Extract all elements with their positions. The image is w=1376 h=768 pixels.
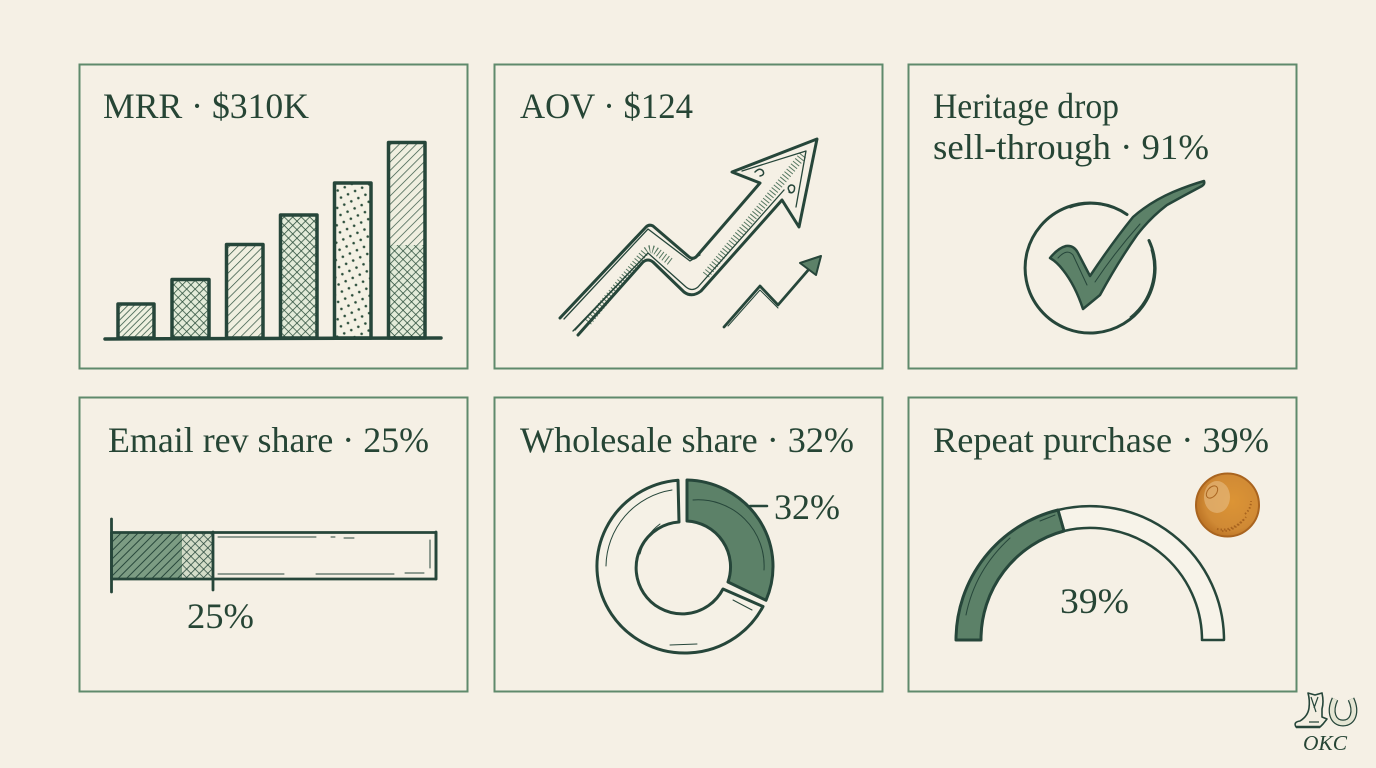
heading: Heritage drop sell-through: sell-through · 91% bbox=[933, 127, 1209, 167]
icon: horseshoe bbox=[1332, 699, 1354, 723]
panel: Email revenue share bbox=[80, 398, 468, 692]
heading: Wholesale share: Wholesale share · 32% bbox=[520, 420, 854, 460]
panel: Repeat purchase bbox=[908, 398, 1296, 692]
panel: MRR bbox=[80, 64, 468, 368]
heading: MRR: MRR · $310K bbox=[103, 86, 309, 126]
donut chart: 32% bbox=[597, 480, 773, 653]
gauge: 39% bbox=[956, 506, 1224, 640]
panel: Wholesale share bbox=[494, 398, 882, 692]
icon: cowboy boot bbox=[1295, 693, 1327, 727]
logo text: OKC: OKC bbox=[1303, 731, 1348, 755]
heading: Heritage drop sell-through: Heritage drop bbox=[933, 86, 1119, 126]
bar chart: rising hatched bars bbox=[105, 142, 441, 339]
progress bar: 25% bbox=[112, 519, 436, 592]
heading: Email rev share: Email rev share · 25% bbox=[108, 420, 429, 460]
value label: 32%: 32% bbox=[774, 487, 840, 527]
value label: 39%: 39% bbox=[1060, 581, 1129, 621]
logo: boot, horseshoe and OKC bbox=[1295, 693, 1354, 755]
panel: AOV bbox=[494, 64, 882, 368]
value label: 25%: 25% bbox=[187, 596, 254, 636]
icon: small rising arrow bbox=[724, 256, 821, 327]
heading: Repeat purchase: Repeat purchase · 39% bbox=[933, 420, 1269, 460]
icon: copper coin bbox=[1196, 474, 1259, 536]
panel: Heritage drop bbox=[908, 64, 1296, 368]
heading: Heritage drop sell-through bbox=[933, 86, 1209, 167]
icon: large rising arrow bbox=[560, 139, 817, 335]
heading: AOV: AOV · $124 bbox=[520, 86, 693, 126]
icon: check mark in circle bbox=[1025, 181, 1204, 333]
